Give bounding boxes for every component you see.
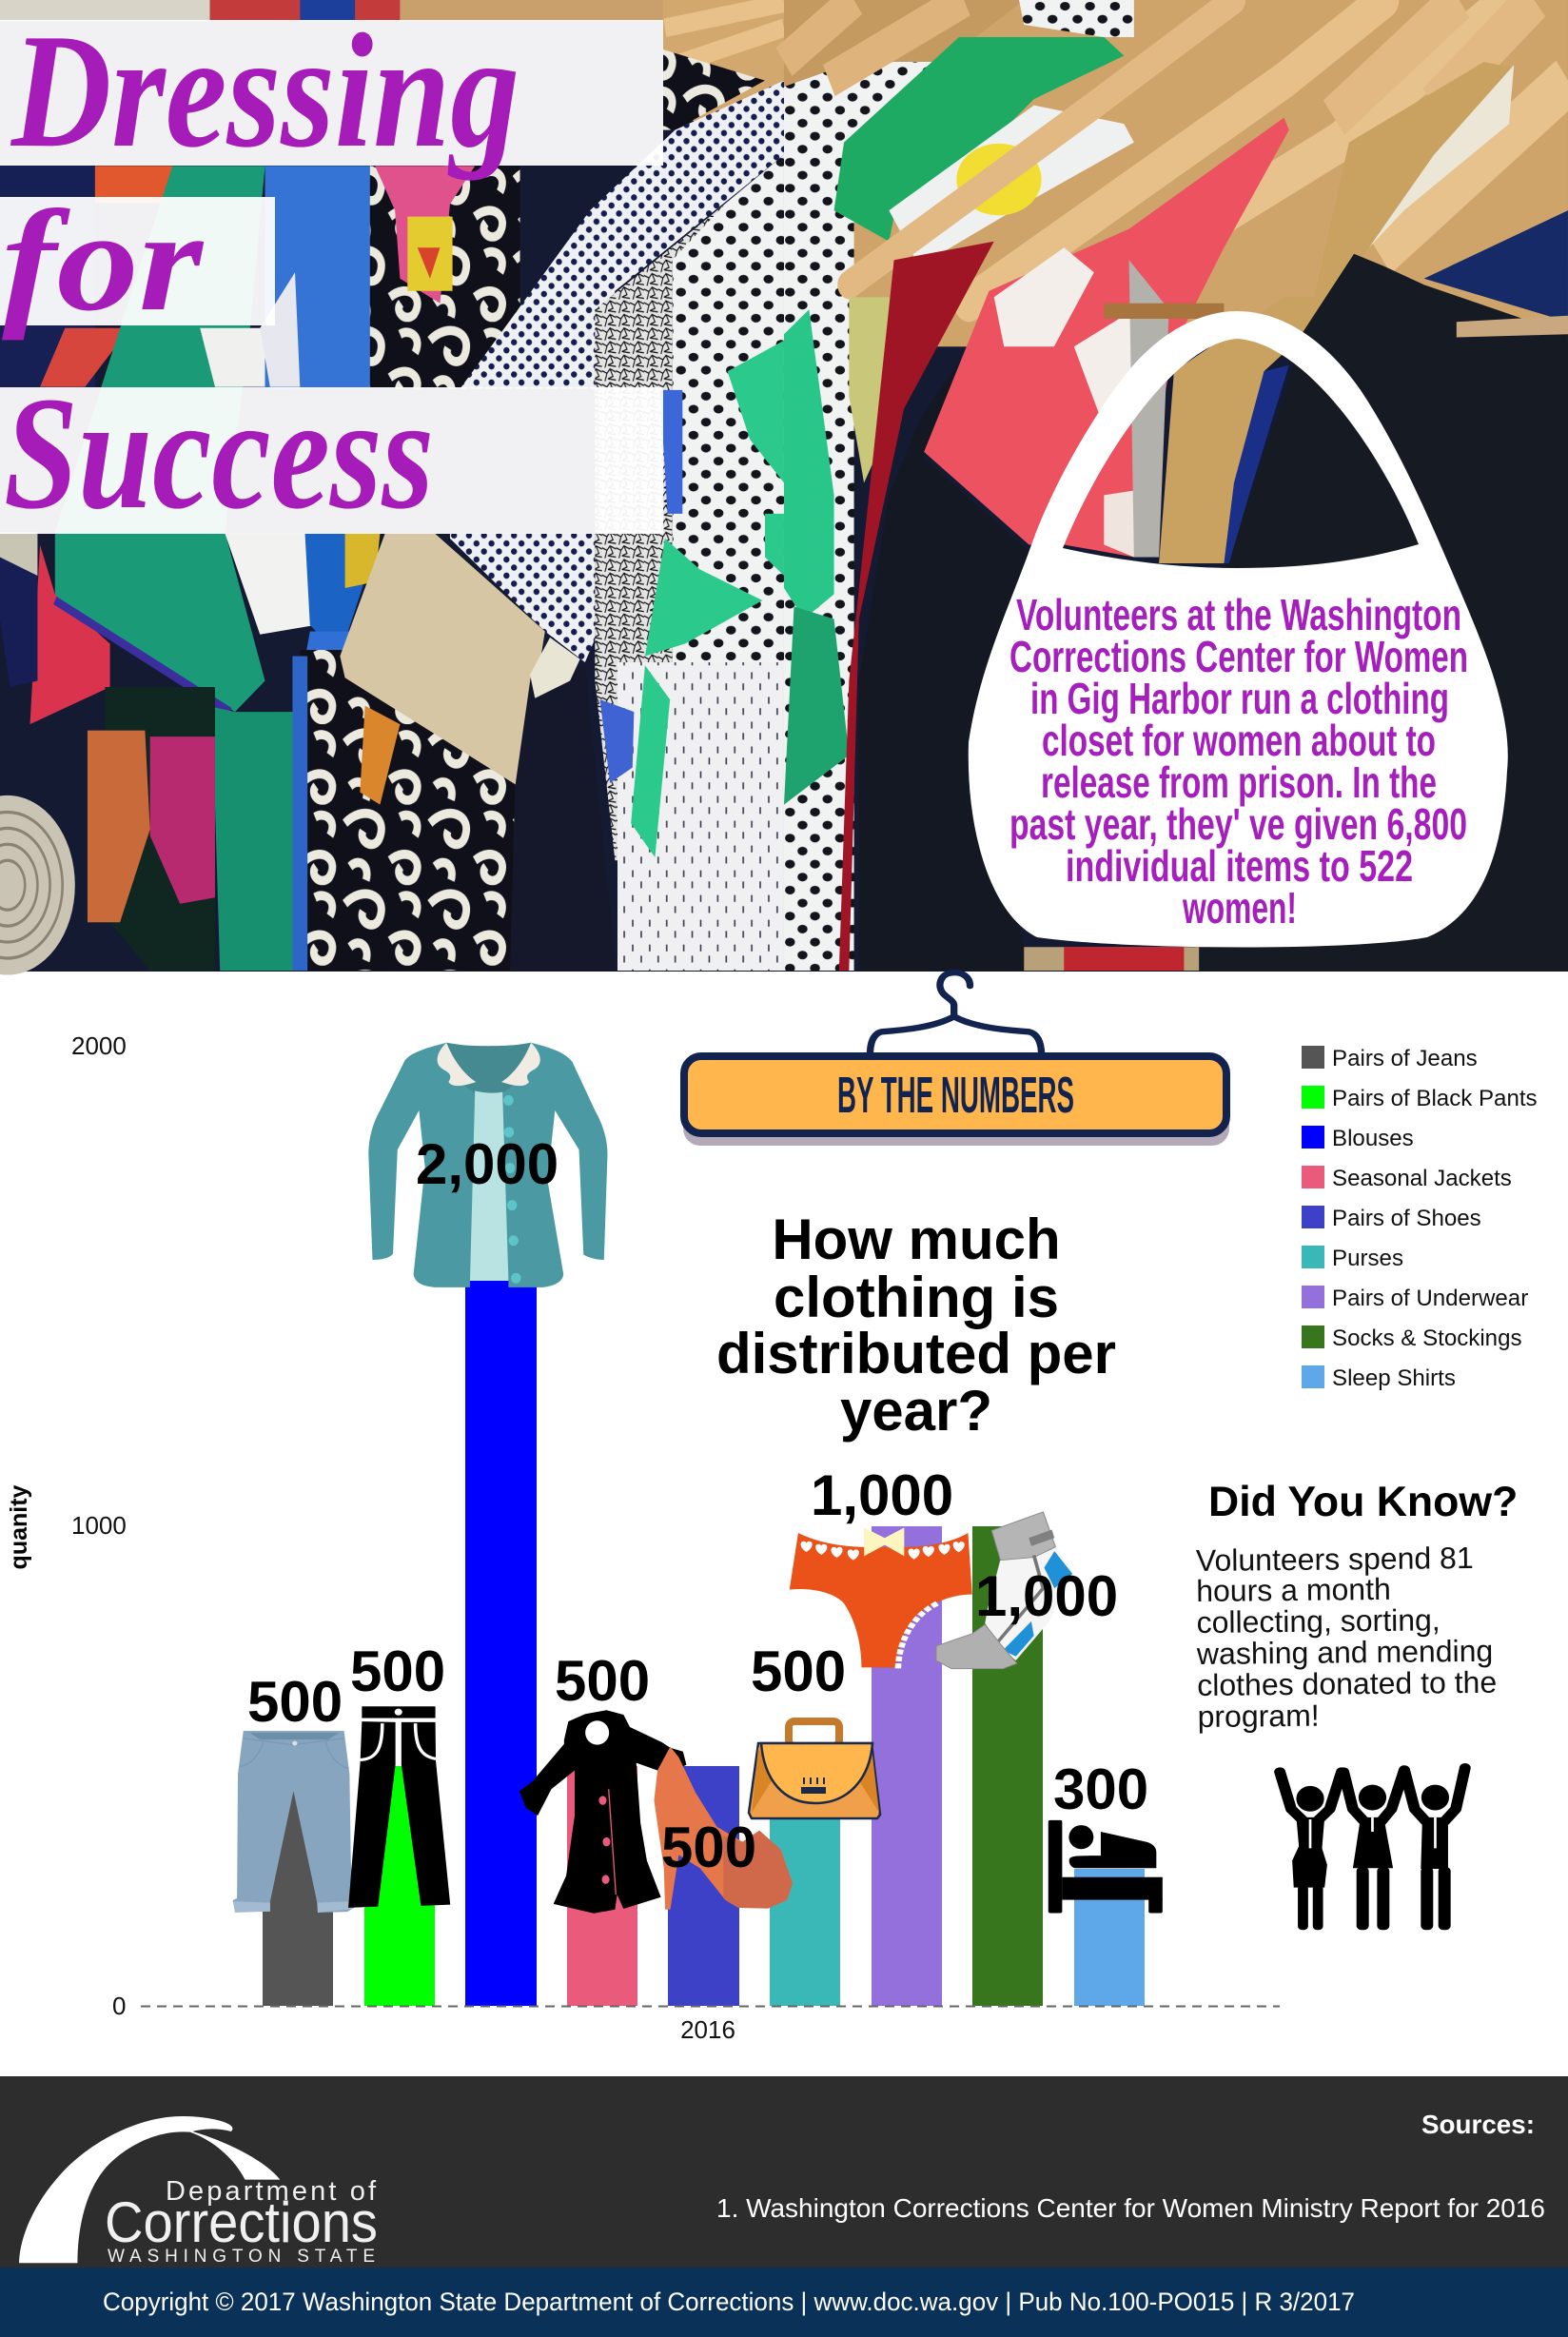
legend: Pairs of Black Pants <box>1332 1086 1538 1111</box>
icon: white purse shape <box>969 311 1508 948</box>
legend: Seasonal Jackets <box>1332 1166 1512 1191</box>
legend: Socks & Stockings <box>1332 1326 1522 1351</box>
logo arch <box>19 2116 280 2263</box>
did you know text: washing and mending <box>1196 1634 1493 1671</box>
value labels: 300 <box>1053 1758 1148 1821</box>
purse text <box>1009 590 1468 933</box>
value labels: 500 <box>555 1649 650 1713</box>
legend: Sleep Shirts <box>1332 1365 1456 1391</box>
y axis labels <box>71 1031 127 2020</box>
icon: sock <box>936 1512 1072 1669</box>
did you know text: clothes donated to the <box>1197 1665 1497 1702</box>
sources heading: Sources: <box>1421 2110 1535 2139</box>
legend: Pairs of Underwear <box>1332 1286 1528 1311</box>
value labels: 1,000 <box>975 1564 1118 1628</box>
banner text: BY THE NUMBERS <box>837 1067 1074 1124</box>
logo text: WASHINGTON STATE <box>108 2247 375 2267</box>
value labels: 1,000 <box>811 1463 953 1527</box>
icon: three people cheering <box>1280 1768 1465 1930</box>
title banner 3 <box>0 387 663 534</box>
logo text <box>105 2176 378 2267</box>
logo text: Corrections <box>105 2190 378 2254</box>
value labels: 500 <box>247 1670 343 1734</box>
did you know heading: Did You Know? <box>1208 1479 1518 1525</box>
y axis labels: 0 <box>112 1992 126 2020</box>
heading: how much clothing <box>716 1208 1116 1443</box>
icon: black coat for seasonal jackets <box>519 1710 686 1914</box>
icon: hanger <box>870 972 1042 1056</box>
icon: underwear <box>790 1527 972 1668</box>
bars <box>263 1047 1145 2006</box>
icon: handbag <box>749 1721 880 1818</box>
source line: 1. Washington Corrections Center for Women Ministry Report for 2016 <box>716 2193 1545 2223</box>
legend: Pairs of Shoes <box>1332 1206 1481 1231</box>
heading: how much clothing: distributed per <box>716 1322 1116 1385</box>
value labels: 500 <box>350 1640 445 1703</box>
copyright bar <box>0 2268 1568 2337</box>
value labels: 500 <box>751 1640 846 1703</box>
title word for: for <box>2 181 205 341</box>
icon: black pants <box>348 1706 450 1908</box>
did you know text <box>1195 1541 1498 1734</box>
icon: high heel shoe <box>654 1747 793 1910</box>
y axis labels: 1000 <box>71 1511 127 1540</box>
panel: did you know <box>1195 1479 1518 1930</box>
purse text: individual items to 522 <box>1066 841 1413 891</box>
title banner 2 <box>0 197 275 325</box>
did you know text: Volunteers spend 81 <box>1196 1541 1474 1578</box>
icon: jeans <box>233 1731 354 1913</box>
value labels: 500 <box>661 1816 756 1879</box>
heading: how much clothing: year? <box>840 1379 992 1443</box>
title: Dressing for Success <box>0 1 663 542</box>
logo text: Department of <box>166 2176 377 2207</box>
title banner 1 <box>0 20 663 166</box>
heading: how much clothing: How much <box>772 1208 1061 1271</box>
callout: purse with intro text <box>969 311 1508 948</box>
legend: Pairs of Jeans <box>1332 1046 1478 1071</box>
banner shadow <box>683 1070 1229 1146</box>
y axis title: quanity <box>6 1484 32 1569</box>
copyright text: Copyright © 2017 Washington State Department of Corrections | www.doc.wa.gov | Pub No.100-PO015 | R 3/2017 <box>103 2288 1355 2316</box>
legend <box>1302 1046 1538 1391</box>
did you know text: hours a month <box>1196 1572 1391 1608</box>
title word Success: Success <box>4 363 434 542</box>
heading: how much clothing: clothing is <box>774 1266 1059 1329</box>
legend: Purses <box>1332 1246 1403 1271</box>
did you know text: collecting, sorting, <box>1196 1602 1441 1640</box>
x axis label: 2016 <box>680 2015 735 2044</box>
y axis labels: 2000 <box>71 1031 127 1060</box>
value labels: 2,000 <box>416 1132 559 1196</box>
purse text: women! <box>1182 883 1297 933</box>
logo: Department of Corrections <box>19 2116 378 2267</box>
legend: Blouses <box>1332 1126 1414 1151</box>
did you know text: program! <box>1197 1699 1320 1734</box>
banner plate <box>684 1056 1226 1133</box>
icon: bed for sleep shirts <box>1049 1820 1163 1913</box>
title word Dressing: Dressing <box>10 1 519 182</box>
bar chart: clothing distributed per year <box>6 1031 1280 2044</box>
icon: jacket for blouses <box>368 1043 607 1287</box>
value labels <box>247 1132 1148 1879</box>
footer background <box>0 2076 1568 2268</box>
background photo of clothes on hangers <box>0 0 1568 975</box>
footer panel: sources and logo <box>0 2076 1568 2337</box>
heading banner: By the Numbers with hanger <box>683 972 1229 1146</box>
